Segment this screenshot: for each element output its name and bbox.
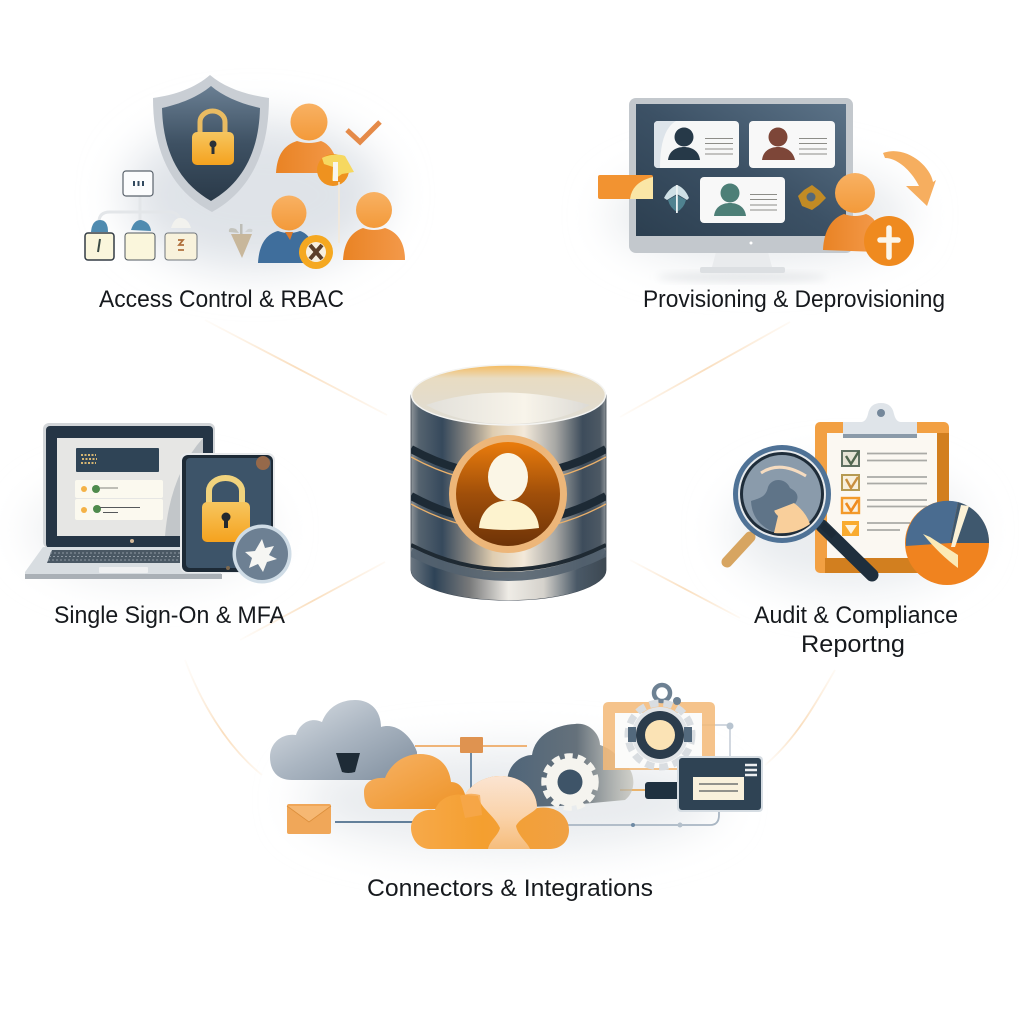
panel: single sign-on and MFA (25, 423, 292, 629)
heading: Single Sign-On & MFA (54, 602, 285, 629)
icon: user with badge (276, 104, 354, 186)
user card 1 (654, 121, 739, 168)
icon: envelope (287, 804, 331, 834)
icon: small shield (664, 185, 689, 213)
user card 3 (700, 177, 785, 223)
icon: shield with lock (153, 75, 269, 212)
heading: Connectors & Integrations (367, 875, 653, 902)
icon: curved arrow (883, 151, 936, 206)
infographic canvas (25, 75, 989, 901)
icon: security badge (232, 524, 292, 584)
icon: large orange cloud (411, 776, 569, 849)
heading: Audit & Compliance (754, 602, 958, 629)
connector rays (185, 320, 835, 775)
orange tag (598, 175, 653, 199)
icon: monitor (629, 98, 853, 282)
icon: user with add badge (823, 173, 914, 266)
icon: magnifying glass (727, 445, 872, 575)
icon: dark cloud with gear (508, 724, 633, 808)
icon: blue user with deny badge (258, 196, 333, 269)
icon: pie chart (905, 501, 989, 585)
icon: orange cloud (364, 754, 467, 809)
icon: check mark (347, 122, 380, 142)
org tree diagram (85, 171, 197, 260)
icon: gear with frame (603, 685, 715, 770)
user card 2 (749, 121, 835, 168)
icon: small gear (798, 185, 826, 210)
panel: access control and RBAC (85, 75, 405, 313)
panel: connectors and integrations (270, 685, 763, 902)
panel: central identity database (411, 365, 606, 600)
icon: message card (645, 756, 763, 812)
icon: database cylinder (411, 365, 606, 600)
icon: clipboard (815, 403, 949, 573)
icon: tablet with lock (180, 453, 275, 573)
heading second line: Reportng (801, 631, 905, 658)
heading: Access Control & RBAC (99, 286, 344, 313)
icon: laptop (25, 423, 222, 579)
icon: user badge (449, 435, 567, 553)
checklist (842, 451, 927, 536)
icon: grey cloud (270, 700, 417, 780)
background glows (30, 120, 970, 850)
heading: Provisioning & Deprovisioning (643, 286, 945, 313)
icon: user (339, 182, 405, 260)
connector lines (335, 722, 734, 828)
panel: provisioning and deprovisioning (598, 98, 945, 313)
icon: connector node (460, 737, 483, 753)
panel: audit and compliance reporting (727, 403, 989, 658)
icon: filter triangle (229, 224, 252, 258)
